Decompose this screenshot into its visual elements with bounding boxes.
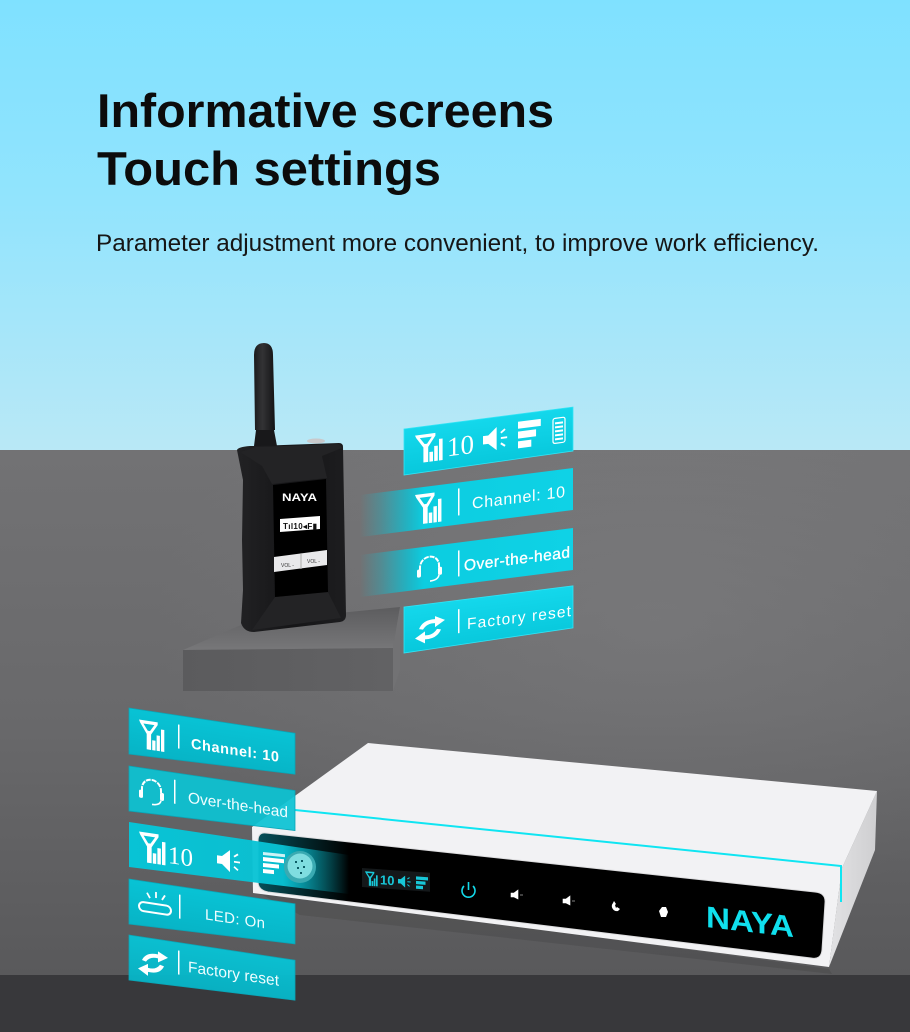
shadow (253, 890, 832, 974)
panel: Factory reset: Factory reset (467, 603, 572, 633)
front screen (258, 833, 825, 958)
panel: left Over-the-head (129, 766, 295, 836)
transmitter logo: NAYA (282, 492, 317, 504)
hex button (659, 907, 668, 917)
cyan light line (295, 810, 841, 902)
panel: left Over-the-head: Over-the-head (188, 790, 288, 822)
sky background (0, 0, 910, 450)
power button (462, 882, 475, 897)
phone button (612, 901, 620, 911)
panel: Channel 10: Channel: 10 (472, 483, 565, 513)
panel: left status row: 10 (168, 842, 193, 873)
panel: Over-the-head (360, 528, 573, 597)
connector port (284, 851, 316, 883)
subtitle: Parameter adjustment more convenient, to improve work efficiency. (96, 230, 819, 257)
title second line: Touch settings (97, 142, 441, 195)
panel: left Channel 10: Channel: 10 (191, 736, 279, 766)
pedestal (183, 607, 400, 691)
transmitter status box: Tıl10◂F▮ (283, 522, 317, 531)
antenna (254, 343, 277, 446)
mini status display: 10 (380, 872, 394, 888)
panel: left Channel 10 (129, 708, 295, 779)
icon: LED strip (139, 890, 171, 915)
receiver box (252, 743, 877, 974)
right side (829, 791, 877, 967)
mini status display (362, 868, 430, 892)
panel: top status row: 10 (447, 429, 474, 462)
panel: top status row (404, 407, 573, 475)
icon: battery (553, 417, 565, 444)
transmitter device (237, 343, 346, 632)
panel: left status row (129, 822, 349, 900)
VOL buttons: VOL - (307, 559, 320, 565)
panel: Factory reset (404, 586, 573, 653)
transmitter body (237, 443, 346, 632)
panel: Channel 10 (360, 468, 573, 537)
panel: left LED On (129, 879, 295, 949)
VOL buttons: VOL - (281, 563, 294, 569)
panel: left Factory reset: Factory reset (188, 959, 280, 990)
transmitter screen (273, 479, 328, 597)
port bars icon (263, 852, 285, 875)
VOL buttons (274, 550, 327, 572)
volume down button (563, 896, 575, 905)
dark bottom strip (0, 975, 910, 1032)
panel: left LED On: LED: On (205, 906, 265, 932)
volume up button (511, 890, 523, 899)
panel: Over-the-head: Over-the-head (464, 544, 570, 575)
grey floor (0, 450, 910, 976)
panel: left Factory reset (129, 935, 295, 1005)
transmitter status box (280, 516, 320, 532)
NAYA logo: NAYA (706, 901, 794, 944)
top and front face (252, 743, 877, 967)
title: Informative screens (97, 84, 554, 137)
